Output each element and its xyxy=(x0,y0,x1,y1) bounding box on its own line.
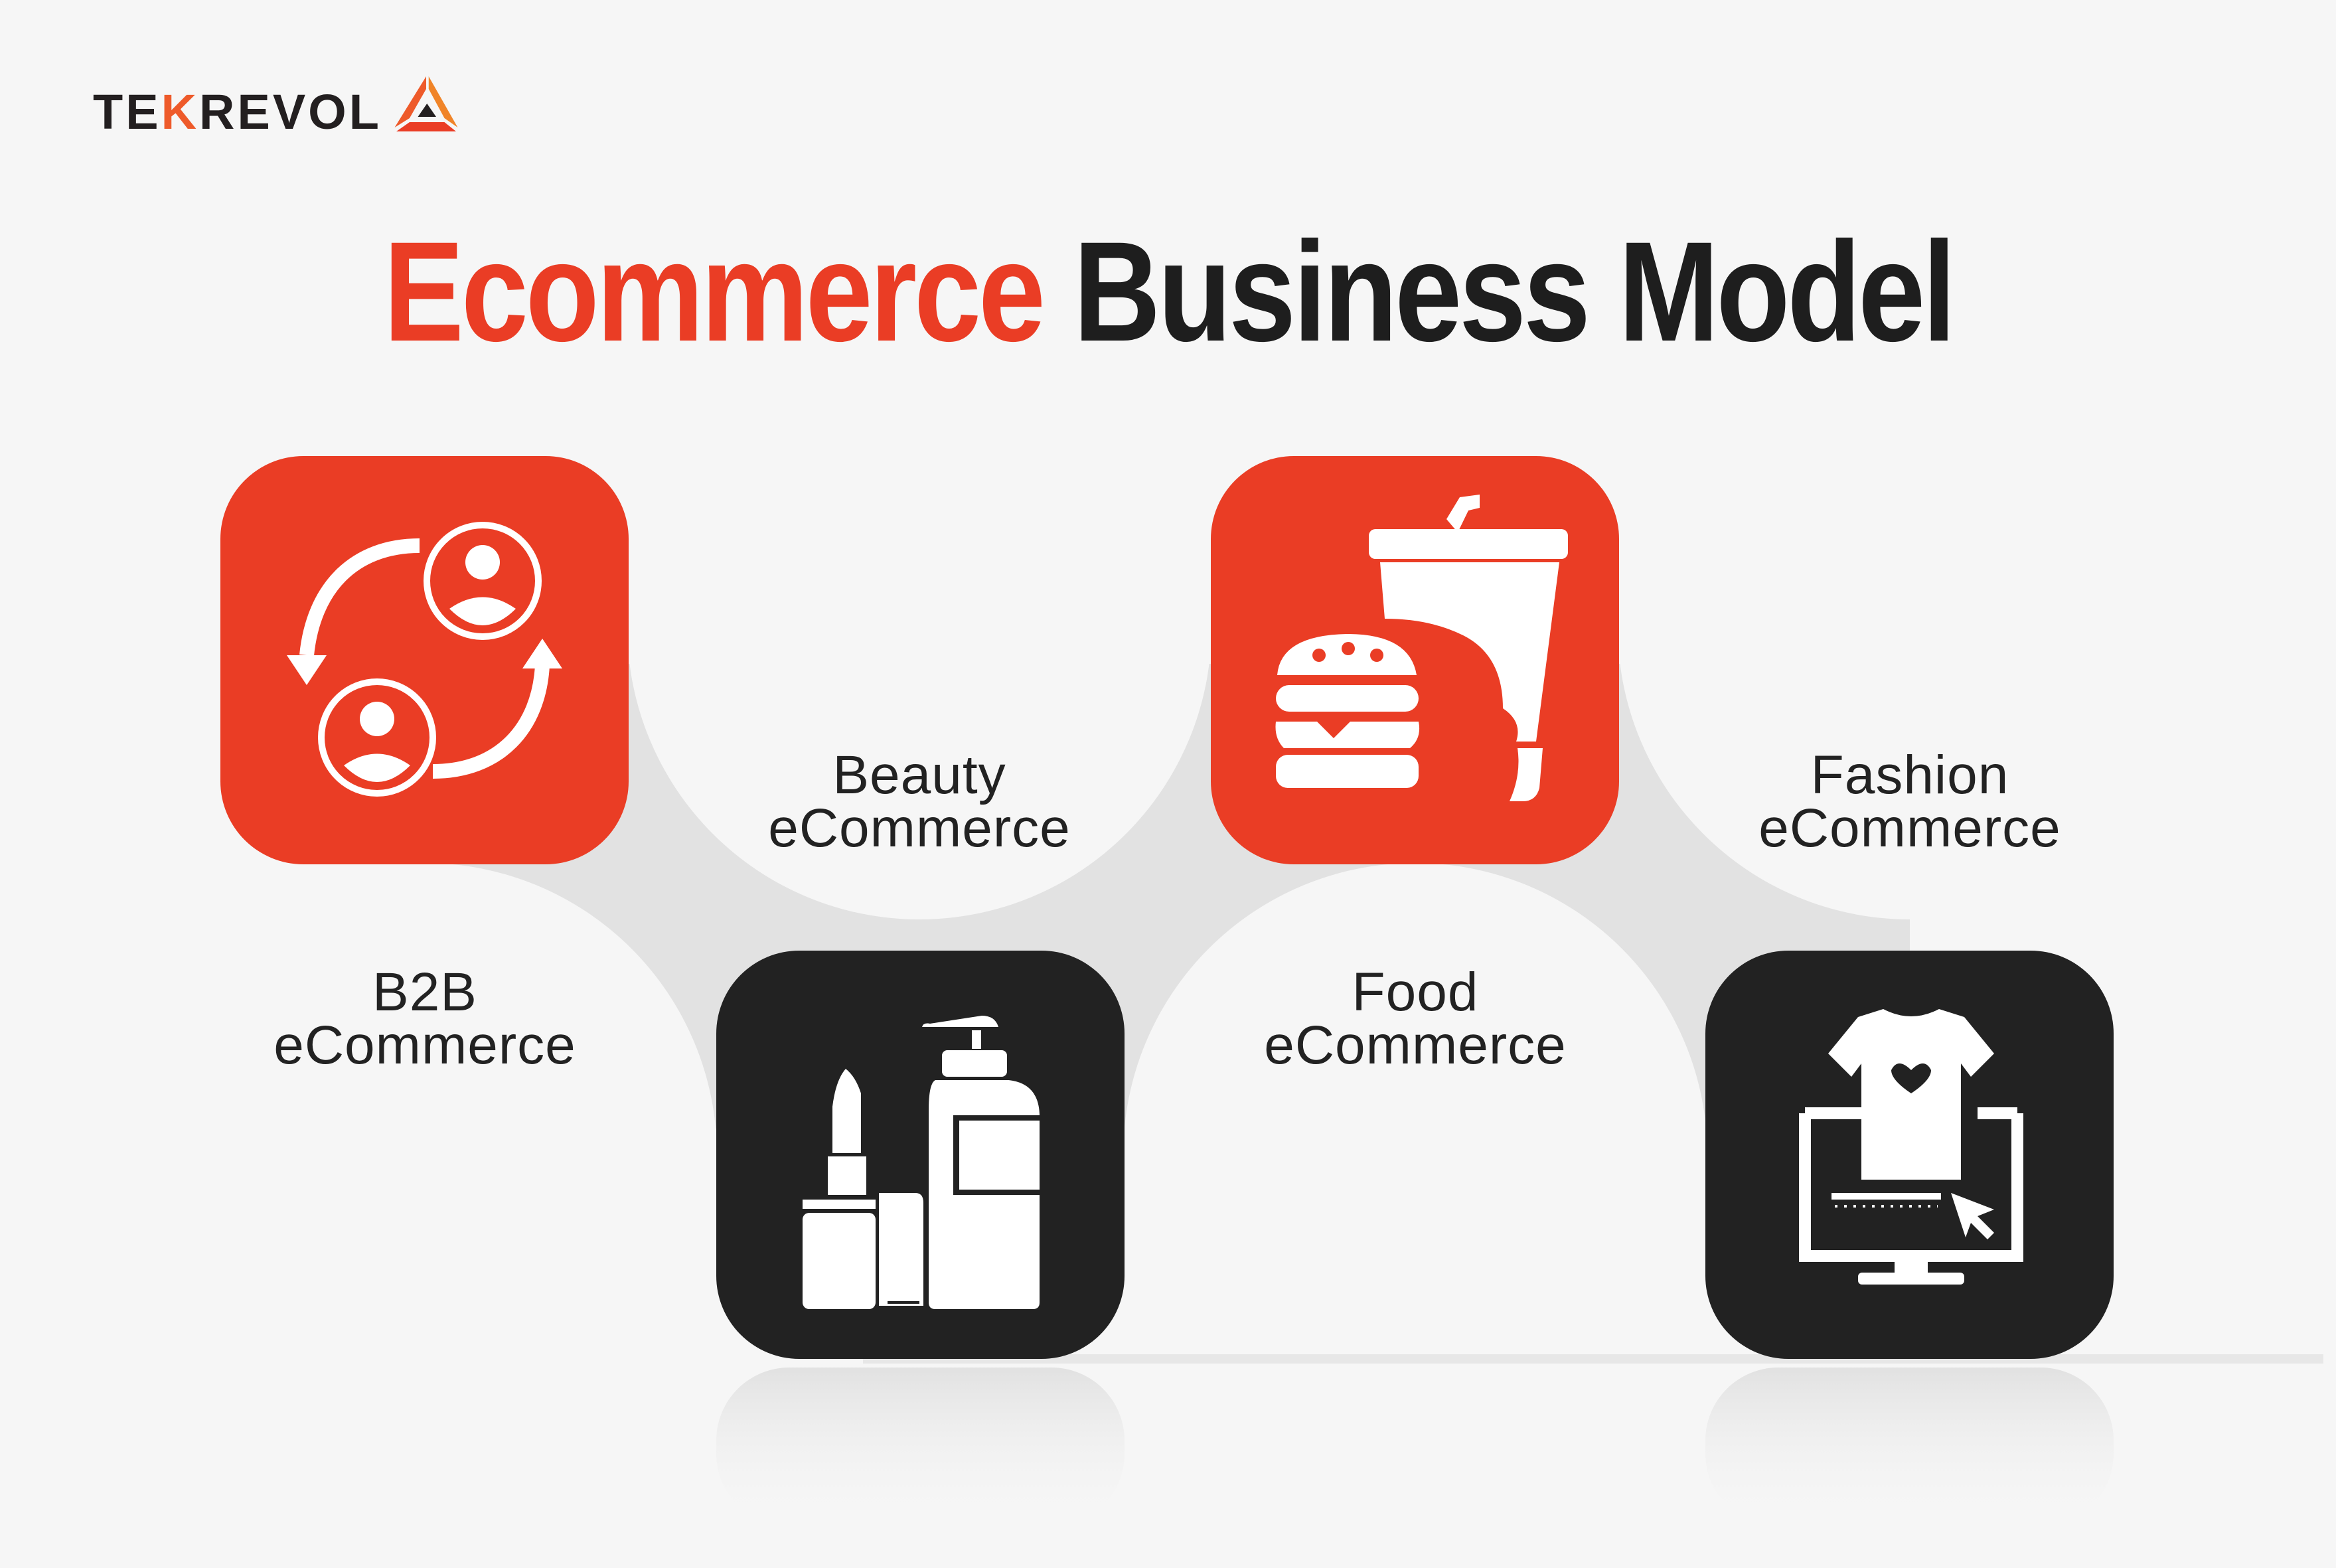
text: B2B eCommerce: B2B xyxy=(372,962,477,1022)
logo xyxy=(93,76,458,139)
text: Food eCommerce: Food xyxy=(1352,962,1478,1022)
text: Food eCommerce: eCommerce xyxy=(1264,1015,1567,1075)
icon: B2B exchange xyxy=(287,522,562,797)
panel: Fashion icon box xyxy=(1705,951,2114,1359)
text: Fashion eCommerce: Fashion xyxy=(1811,745,2009,805)
text: Beauty eCommerce: eCommerce xyxy=(768,798,1071,858)
icon: online fashion xyxy=(1799,1009,2023,1285)
title: Ecommerce Business Model xyxy=(383,212,1953,371)
panel: B2B icon box xyxy=(220,456,629,864)
text: Fashion eCommerce xyxy=(1758,745,2061,858)
logo: TEKREVOL xyxy=(93,84,382,139)
icon: logo triangle xyxy=(394,76,458,131)
icon: cosmetics xyxy=(803,1016,1040,1309)
text: B2B eCommerce: eCommerce xyxy=(273,1015,576,1075)
panel: Food icon box xyxy=(1211,456,1619,864)
text: Beauty eCommerce xyxy=(768,745,1071,858)
text: B2B eCommerce xyxy=(273,962,576,1075)
icon: burger and drink xyxy=(1276,495,1568,801)
panel: Beauty icon box xyxy=(716,951,1125,1359)
text: Food eCommerce xyxy=(1264,962,1567,1075)
text: Fashion eCommerce: eCommerce xyxy=(1758,798,2061,858)
text: Beauty eCommerce: Beauty xyxy=(832,745,1006,805)
